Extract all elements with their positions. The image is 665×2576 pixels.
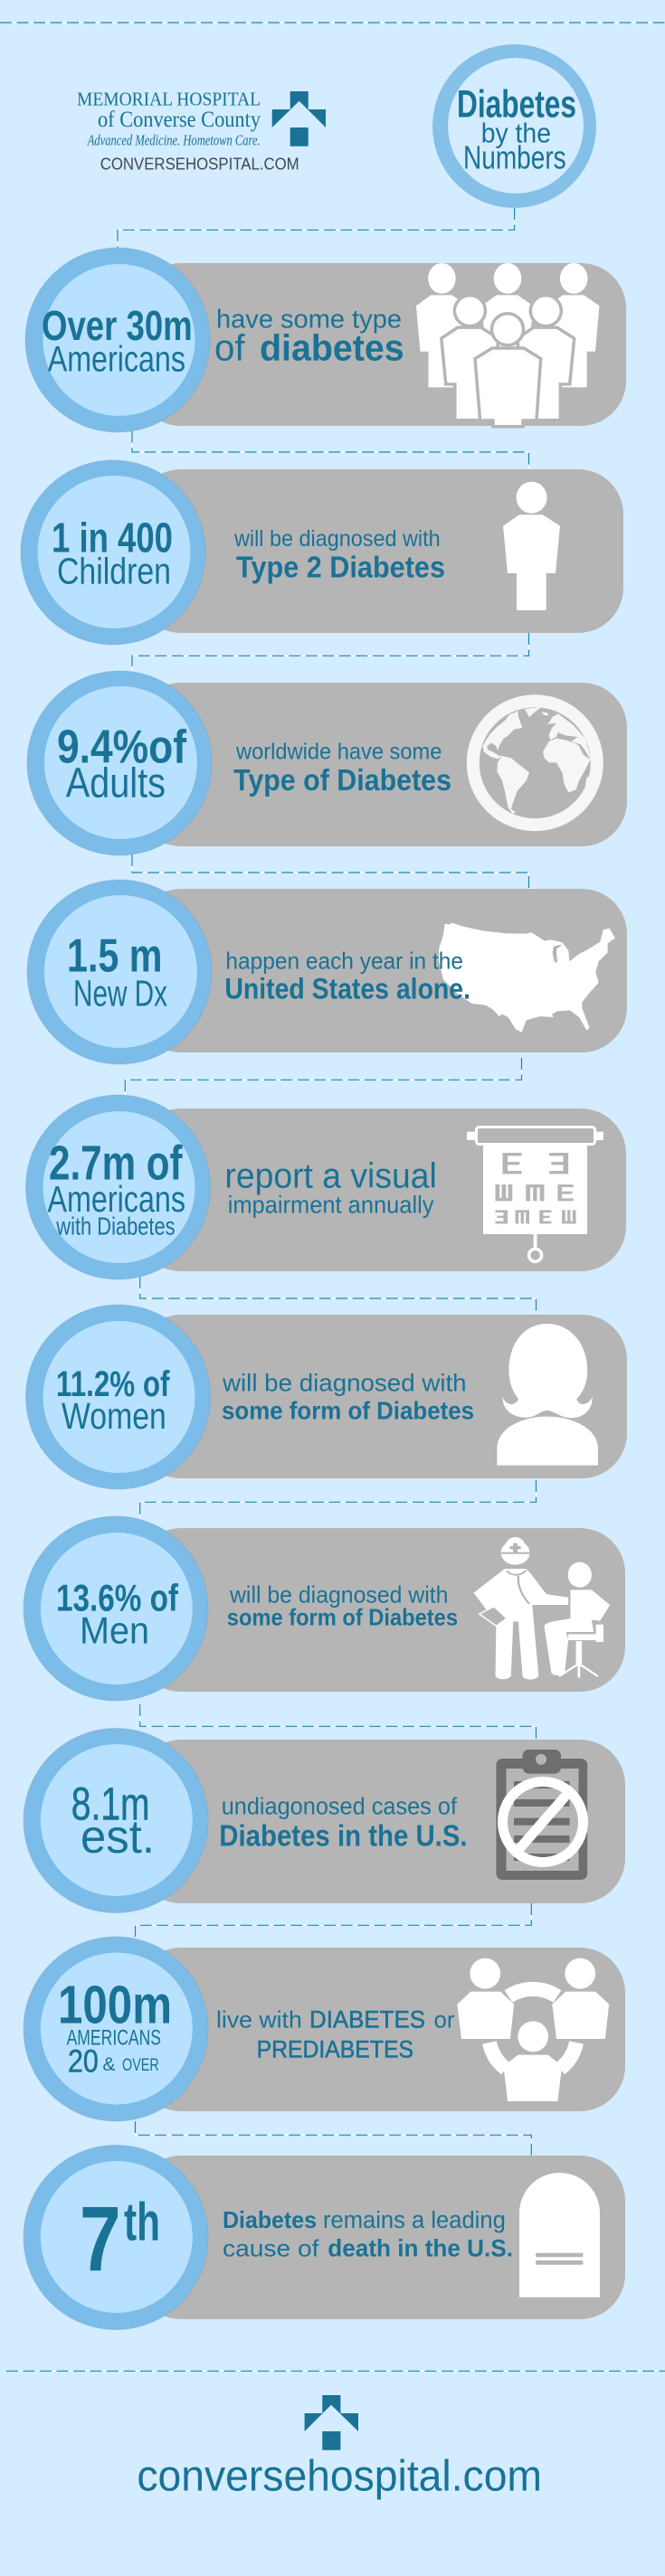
title badge: Diabetes by the Numbers: by the	[481, 118, 551, 149]
panel: over 30m Americans	[25, 248, 626, 432]
panel: 2.7m Americans with diabetes: Americans	[47, 1178, 185, 1220]
header logo: Memorial Hospital of Converse County: of Converse County	[98, 106, 261, 132]
panel: over 30m Americans: diabetes	[260, 326, 404, 368]
icon: globe	[473, 701, 597, 825]
panel: 7th leading cause of death: th	[124, 2192, 160, 2251]
header logo: Memorial Hospital of Converse County: Advanced Medicine. Hometown Care.	[87, 132, 261, 149]
icon: doctor and patient	[474, 1537, 610, 1679]
panel: 11.2% of women: some form of Diabetes	[222, 1396, 474, 1424]
panel: 100m Americans 20 and over	[24, 1937, 625, 2121]
icon: tombstone	[519, 2173, 600, 2298]
footer website: conversehospital.com	[137, 2453, 542, 2501]
title badge: Diabetes by the Numbers: Diabetes	[457, 82, 576, 126]
panel: 1.5 m new diagnoses: New Dx	[73, 972, 167, 1014]
panel: 100m Americans 20 and over: PREDIABETES	[257, 2036, 413, 2063]
panel: 8.1m undiagnosed cases: undiagonosed cases of	[222, 1795, 458, 1820]
icon: eye chart	[467, 1127, 603, 1261]
panel: 100m Americans 20 and over: &	[102, 2054, 116, 2075]
panel: 13.6% of men: will be diagnosed with	[229, 1581, 449, 1609]
panel: 1.5 m new diagnoses: United States alone.	[224, 971, 470, 1005]
panel: 1.5 m new diagnoses	[27, 880, 627, 1064]
panel: 1 in 400 children: will be diagnosed with	[233, 526, 441, 552]
panel: 1.5 m new diagnoses: happen each year in the	[225, 948, 463, 975]
panel: 100m Americans 20 and over: 20	[68, 2043, 99, 2080]
panel: 13.6% of men: 13.6% of	[56, 1577, 178, 1619]
panel: 9.4% of adults: 9.4%of	[57, 721, 187, 773]
panel: over 30m Americans: Americans	[48, 340, 185, 380]
panel: 8.1m undiagnosed cases: 8.1m	[71, 1778, 150, 1829]
panel: 2.7m Americans with diabetes: with Diabetes	[56, 1213, 176, 1241]
panel: 2.7m Americans with diabetes: impairment annually	[228, 1192, 434, 1219]
icon: USA map	[439, 923, 615, 1033]
panel: 100m Americans 20 and over: 100m	[58, 1975, 172, 2034]
panel: 11.2% of women: Women	[62, 1395, 166, 1437]
panel: over 30m Americans: Over 30m	[42, 302, 193, 349]
icon: group of people	[416, 263, 599, 427]
panel: 2.7m Americans with diabetes	[25, 1095, 626, 1279]
icon: crossed-out clipboard	[496, 1750, 587, 1880]
panel: 9.4% of adults: worldwide have some	[235, 739, 442, 764]
icon: woman silhouette	[497, 1324, 598, 1466]
panel: 11.2% of women: will be diagnosed with	[222, 1369, 467, 1396]
title badge: Diabetes by the Numbers	[432, 44, 596, 208]
panel: 100m Americans 20 and over: DIABETES	[309, 2006, 425, 2033]
panel: 7th leading cause of death: cause of	[223, 2235, 319, 2262]
panel: 100m Americans 20 and over: live with	[216, 2006, 302, 2033]
panel: over 30m Americans: have some type	[216, 306, 402, 335]
panel: 13.6% of men	[24, 1516, 625, 1701]
panel: 100m Americans 20 and over: or	[434, 2006, 455, 2033]
panel: over 30m Americans: of	[214, 326, 245, 368]
footer logo mark	[305, 2395, 358, 2450]
panel: 2.7m Americans with diabetes: report a visual	[224, 1156, 437, 1195]
panel: 7th leading cause of death: death in the U.S.	[328, 2235, 513, 2262]
panel: 7th leading cause of death: 7	[80, 2188, 121, 2291]
panel: 1.5 m new diagnoses: 1.5 m	[67, 929, 163, 982]
header logo: Memorial Hospital of Converse County: CONVERSEHOSPITAL.COM	[100, 156, 299, 174]
panel: 11.2% of women	[25, 1305, 627, 1489]
panel: 8.1m undiagnosed cases: est.	[81, 1811, 155, 1864]
panel: 9.4% of adults	[27, 671, 627, 855]
panel: 1 in 400 children: Type 2 Diabetes	[236, 551, 445, 584]
panel: 1 in 400 children	[21, 460, 623, 645]
panel: 100m Americans 20 and over: AMERICANS	[67, 2026, 161, 2051]
panel: 1 in 400 children: Children	[57, 551, 171, 592]
panel: 13.6% of men: Men	[80, 1609, 149, 1651]
icon: three people in a circle	[457, 1958, 609, 2101]
panel: 9.4% of adults: Adults	[66, 760, 166, 807]
panel: 11.2% of women: 11.2% of	[56, 1364, 170, 1404]
panel: 8.1m undiagnosed cases: Diabetes in the U.S.	[219, 1820, 468, 1854]
panel: 100m Americans 20 and over: OVER	[122, 2055, 159, 2075]
header logo: Memorial Hospital of Converse County: MEMORIAL HOSPITAL	[77, 89, 261, 110]
panel: 9.4% of adults: Type of Diabetes	[233, 764, 451, 797]
panel: 7th leading cause of death: remains a leading	[323, 2208, 506, 2233]
icon: single person	[503, 482, 560, 610]
panel: 8.1m undiagnosed cases	[24, 1729, 625, 1913]
panel: 1 in 400 children: 1 in 400	[52, 514, 173, 561]
header logo: Memorial Hospital of Converse County	[77, 89, 326, 174]
title badge: Diabetes by the Numbers: Numbers	[463, 139, 566, 176]
panel: 7th leading cause of death	[24, 2145, 625, 2329]
panel: 7th leading cause of death: Diabetes	[223, 2206, 317, 2233]
panel: 2.7m Americans with diabetes: 2.7m of	[49, 1136, 183, 1190]
panel: 13.6% of men: some form of Diabetes	[227, 1603, 458, 1630]
